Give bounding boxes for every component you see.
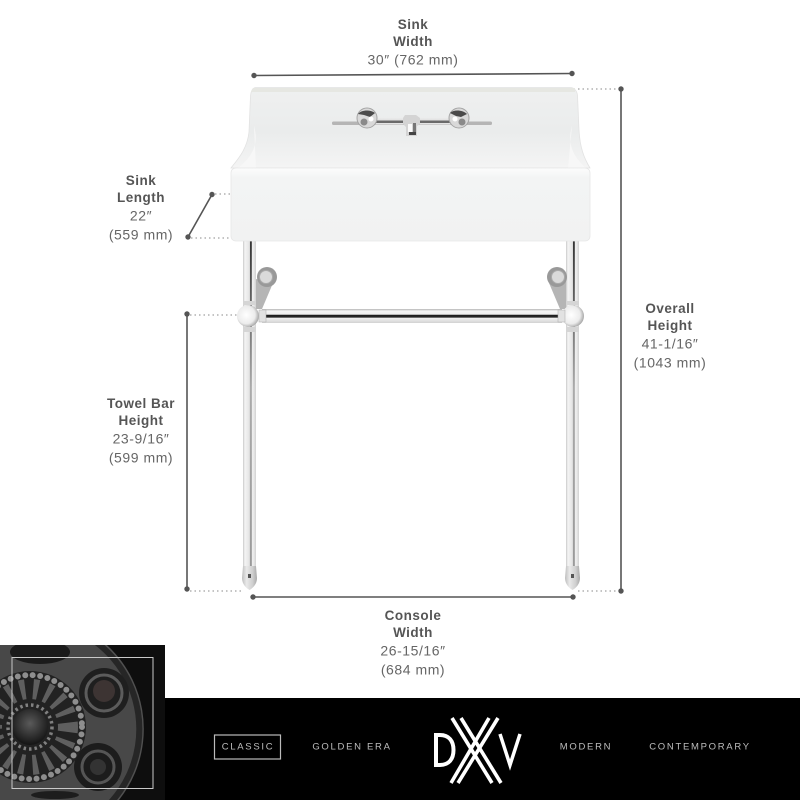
rim highlight	[251, 88, 575, 92]
left leg	[242, 240, 257, 590]
dimension: overall height: (1043 mm)	[634, 354, 706, 370]
petals	[0, 689, 68, 765]
towel bar	[262, 309, 562, 323]
right side return	[568, 126, 586, 168]
right leg	[565, 240, 580, 590]
medallion rim	[104, 645, 144, 800]
backsplash	[231, 88, 590, 168]
left ball joint	[237, 301, 266, 332]
letter X	[451, 718, 501, 783]
letter V	[500, 734, 520, 765]
dimension: overall height	[578, 86, 706, 594]
medallion field	[0, 645, 136, 800]
classic selected box	[214, 735, 280, 759]
collection nav: CONTEMPORARY	[649, 742, 751, 752]
right bracket	[547, 267, 567, 309]
left valve	[357, 108, 377, 128]
dimension: sink length: 22″	[130, 208, 152, 224]
dimension: sink length: (559 mm)	[109, 226, 173, 242]
faucet handle bar	[332, 122, 492, 125]
dimension: towel bar height: (599 mm)	[109, 450, 173, 466]
right ball joint	[558, 301, 584, 332]
dimension: console width: 26-15/16″	[380, 642, 446, 658]
scroll: bottom	[31, 791, 79, 799]
medallion disc	[95, 645, 142, 800]
dimension: overall height: 41-1/16″	[642, 336, 698, 352]
scroll: upper right	[79, 668, 129, 718]
footer black band	[165, 698, 800, 800]
collection nav: CLASSIC	[222, 742, 274, 752]
scroll: top	[10, 645, 70, 664]
knob surround	[8, 705, 52, 749]
right valve	[449, 108, 469, 128]
dimension: sink width: Width	[393, 34, 433, 49]
DXV logo	[436, 718, 520, 783]
dimension: console width	[250, 594, 576, 678]
left side return	[238, 126, 256, 168]
front apron	[231, 168, 590, 241]
collection nav	[214, 735, 751, 759]
dimension: towel bar height: 23-9/16″	[113, 430, 169, 446]
dimension: towel bar height: Height	[118, 413, 164, 428]
dimension: overall height: Height	[648, 318, 693, 333]
bead ring	[0, 675, 82, 779]
left bracket	[256, 267, 277, 309]
dimension: sink width: Sink	[398, 17, 428, 32]
dimension: overall height: Overall	[645, 301, 695, 316]
dimension: sink length	[109, 173, 231, 242]
collection nav: MODERN	[560, 742, 612, 752]
collection nav: GOLDEN ERA	[312, 742, 392, 752]
centre knob	[16, 709, 45, 745]
dimension: sink length: Length	[117, 190, 165, 205]
dimension: towel bar height	[107, 311, 243, 592]
scroll: lower right	[74, 743, 122, 791]
dimension: sink width	[251, 17, 575, 78]
dimension: console width: Console	[385, 608, 441, 623]
sink basin	[231, 88, 590, 241]
dimension: sink width: 30″ (762 mm)	[368, 52, 458, 68]
dimension: sink length: Sink	[126, 173, 156, 188]
spout	[403, 115, 420, 136]
letter D	[436, 735, 454, 765]
dimension: towel bar height: Towel Bar	[107, 396, 175, 411]
inner rosette	[0, 671, 86, 783]
dimension: console width: (684 mm)	[381, 662, 445, 678]
medallion frame	[12, 658, 153, 788]
dimension: console width: Width	[393, 625, 433, 640]
medallion panel	[0, 645, 165, 800]
towel bar console legs	[237, 240, 584, 590]
wall faucet	[332, 108, 492, 136]
